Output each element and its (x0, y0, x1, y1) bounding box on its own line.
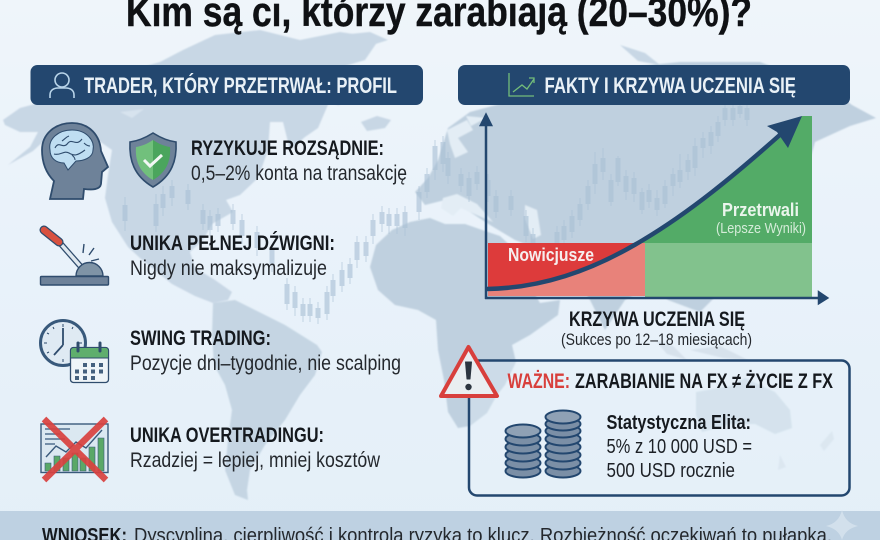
item: risk (130, 133, 407, 187)
callout: earning on FX is not living on FX: Statystyczna Elita: (606, 412, 751, 434)
item: risk: 0,5–2% konta na transakcję (191, 161, 407, 185)
callout: earning on FX is not living on FX: 500 USD rocznie (606, 459, 735, 482)
candlestick chart background (125, 100, 747, 324)
footer: conclusion (0, 510, 880, 540)
item: swing trading: SWING TRADING: (130, 326, 271, 350)
zone: novices (488, 243, 637, 288)
item: overtrading: Rzadziej = lepiej, mniej kosztów (130, 448, 380, 472)
callout: earning on FX is not living on FX: 5% z 10 000 USD = (606, 435, 752, 458)
item: leverage: UNIKA PEŁNEJ DŹWIGNI: (130, 230, 335, 255)
chart caption (561, 307, 752, 349)
callout: earning on FX is not living on FX (441, 347, 850, 496)
panel: facts and learning curve (441, 65, 850, 496)
item: risk: RYZYKUJE ROZSĄDNIE: (191, 136, 384, 160)
item: overtrading: UNIKA OVERTRADINGU: (130, 423, 324, 447)
heading: profile (30, 65, 423, 105)
chart caption: (Sukces po 12–18 miesiącach) (561, 331, 752, 349)
chart: learning curve: Przetrwali (722, 199, 799, 220)
item: swing trading: Pozycje dni–tygodnie, nie scalping (130, 351, 401, 375)
panel: survivor trader profile (30, 65, 423, 480)
chart: learning curve (481, 115, 827, 303)
icon: crossed-out chart (41, 419, 108, 480)
icon: clock and calendar (40, 320, 108, 382)
chart: learning curve: Nowicjusze (508, 245, 594, 265)
item: leverage (40, 230, 335, 285)
icon: head with brain (42, 123, 108, 199)
icon: lever (40, 230, 108, 285)
item: overtrading (41, 419, 380, 480)
axis: x (485, 292, 827, 303)
heading: facts: FAKTY I KRZYWA UCZENIA SIĘ (544, 73, 796, 98)
heading: facts (458, 65, 850, 105)
icon: warning triangle (441, 347, 497, 396)
callout: earning on FX is not living on FX: WAŻNE: (508, 369, 570, 393)
icon: shield (130, 133, 176, 187)
zone: light green (645, 243, 812, 297)
chart caption: KRZYWA UCZENIA SIĘ (569, 307, 745, 331)
item: leverage: Nigdy nie maksymalizuje (130, 256, 327, 280)
zone: light red (488, 243, 645, 296)
zone: survivors (637, 116, 812, 243)
chart: learning curve: (Lepsze Wyniki) (716, 220, 806, 237)
axis: y (481, 115, 491, 299)
heading: profile: TRADER, KTÓRY PRZETRWAŁ: PROFIL (84, 73, 397, 98)
item: swing trading (40, 320, 401, 382)
curve arrow (487, 116, 802, 289)
icon: coin stacks (506, 410, 580, 478)
